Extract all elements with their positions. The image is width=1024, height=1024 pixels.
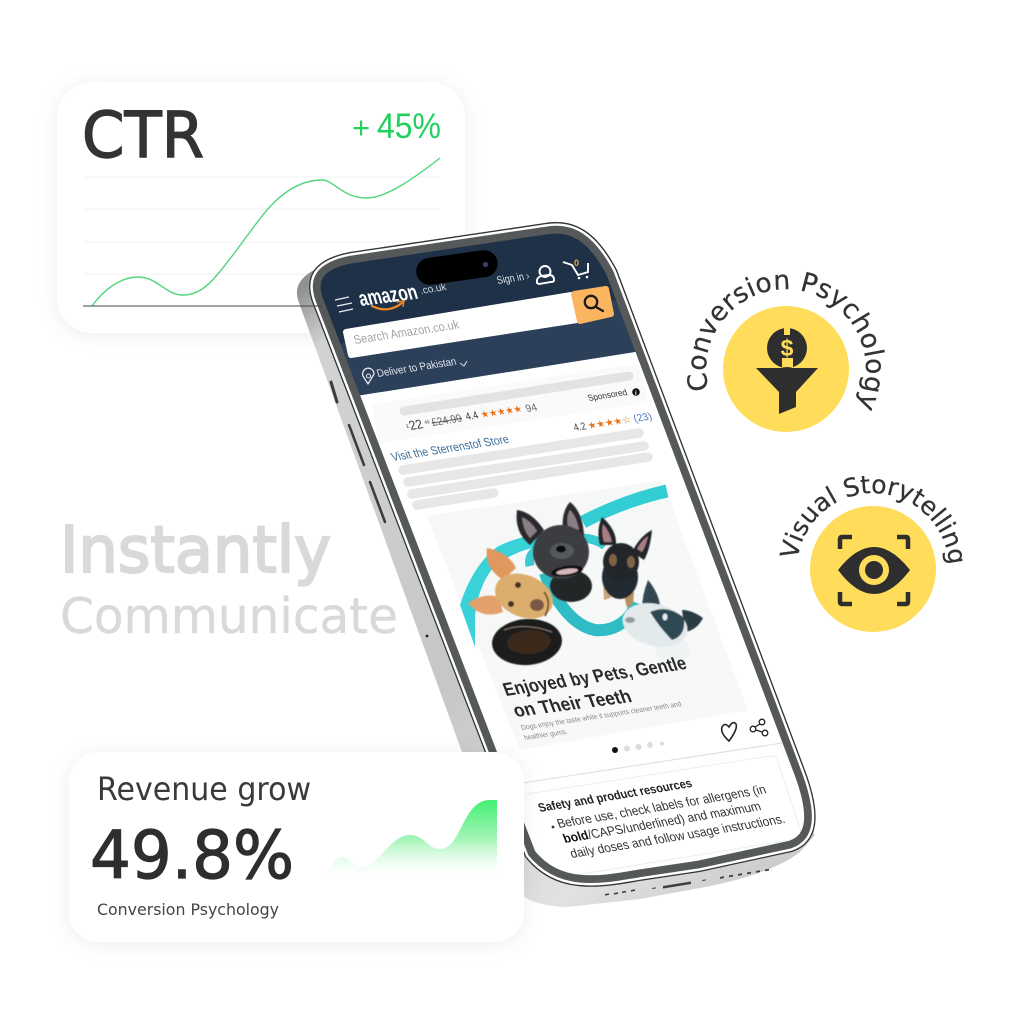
- icon: heart: [722, 723, 736, 741]
- icon: eye in viewfinder: [838, 537, 910, 604]
- teal swoosh: [460, 491, 667, 647]
- badge: Visual Storytelling: [779, 476, 963, 632]
- badge: Conversion Psychology: [686, 272, 885, 432]
- search bar: Search Amazon.co.uk: [352, 317, 462, 347]
- area chart: [325, 800, 497, 878]
- product image panel: [428, 480, 704, 740]
- rating: 4.2: [572, 421, 588, 434]
- delivery row: Deliver to Pakistan: [375, 356, 458, 380]
- safety resources box: Before use, check labels for allergens (in: [555, 782, 768, 831]
- label: Conversion Psychology: Conversion Psychology: [97, 900, 279, 919]
- icon: funnel with dollar coin: $: [781, 335, 794, 361]
- sponsored card: [400, 372, 640, 430]
- phone mockup: [296, 222, 816, 907]
- safety resources box: bold/CAPS/underlined) and maximum: [561, 798, 763, 846]
- price: ★★★★★: [479, 404, 524, 421]
- line chart: CTR trend: [84, 158, 440, 306]
- bottom speaker and port: [605, 869, 769, 896]
- image headline: Enjoyed by Pets, Gentle: [500, 652, 689, 700]
- label: Revenue grow: Revenue grow: [97, 770, 311, 808]
- icon: magnifier: [585, 296, 603, 311]
- dynamic island: [416, 250, 498, 285]
- price: 4.4: [464, 410, 480, 423]
- curved label: Conversion Psychology: [686, 272, 885, 412]
- heading: CTR: CTR: [82, 99, 204, 172]
- price: £24.99: [430, 413, 464, 429]
- text: Instantly Communicate: Instantly: [60, 514, 331, 588]
- bezel rings: [309, 222, 816, 887]
- chart baseline crossing phone edge: [83, 305, 322, 307]
- rating: [574, 412, 652, 430]
- metric: plus 45 percent: 45%: [377, 107, 441, 146]
- image headline: [502, 657, 686, 716]
- icon: cart: 0: [574, 258, 579, 268]
- metric: plus 45 percent: +: [352, 110, 370, 145]
- text: Instantly Communicate: [60, 514, 398, 645]
- phone screen: [309, 222, 816, 887]
- price: [406, 404, 538, 430]
- metric: 49.8 percent: 49.8%: [90, 817, 294, 894]
- app header: [309, 222, 647, 397]
- tan dog: [468, 548, 554, 620]
- metric: plus 45 percent: [352, 107, 441, 146]
- store link: Visit the Sterrenstof Store: [389, 432, 511, 464]
- price: 22: [406, 416, 425, 433]
- rating: (23): [632, 412, 654, 425]
- black dog lying down: [490, 617, 564, 667]
- search bar: [346, 289, 611, 355]
- amazon logo: amazon: [355, 279, 420, 311]
- price: £: [405, 424, 411, 430]
- safety resources box: daily doses and follow usage instructions.: [568, 811, 787, 861]
- dogs: [468, 502, 703, 667]
- black bulldog: [517, 502, 592, 602]
- image caption: Dogs enjoy the taste while it supports cleaner teeth and: [519, 699, 683, 732]
- image headline: on Their Teeth: [510, 685, 634, 721]
- carousel dots: [612, 742, 664, 753]
- safety resources box: Safety and product resources: [536, 776, 694, 815]
- icon: cart: [563, 258, 588, 279]
- price: 49: [423, 419, 431, 425]
- rating: ★★★★☆: [586, 415, 633, 432]
- image caption: [519, 699, 683, 742]
- curved label: Visual Storytelling: [779, 476, 963, 563]
- phone body: silver edge: [297, 268, 815, 907]
- german shepherd dog: [598, 517, 652, 608]
- icon: funnel with dollar coin: [756, 327, 818, 414]
- image caption: healthier gums.: [522, 727, 569, 742]
- icon: user: [537, 266, 554, 284]
- icon: share: [750, 719, 768, 736]
- sponsored card: i: [635, 391, 637, 397]
- panel: revenue card: [69, 752, 524, 942]
- sponsored card: Sponsored: [586, 387, 629, 403]
- icon: hamburger menu: [335, 297, 353, 312]
- amazon logo: .co.uk: [419, 282, 449, 297]
- panel: CTR card: [57, 82, 465, 333]
- text: Instantly Communicate: Communicate: [60, 588, 398, 645]
- placeholder text bars: [403, 433, 648, 505]
- text: sign in: Sign in ›: [495, 270, 531, 287]
- grey and white dog: [618, 580, 703, 664]
- price: 94: [524, 403, 539, 415]
- side buttons: [331, 382, 428, 637]
- safety resources box: [523, 743, 803, 880]
